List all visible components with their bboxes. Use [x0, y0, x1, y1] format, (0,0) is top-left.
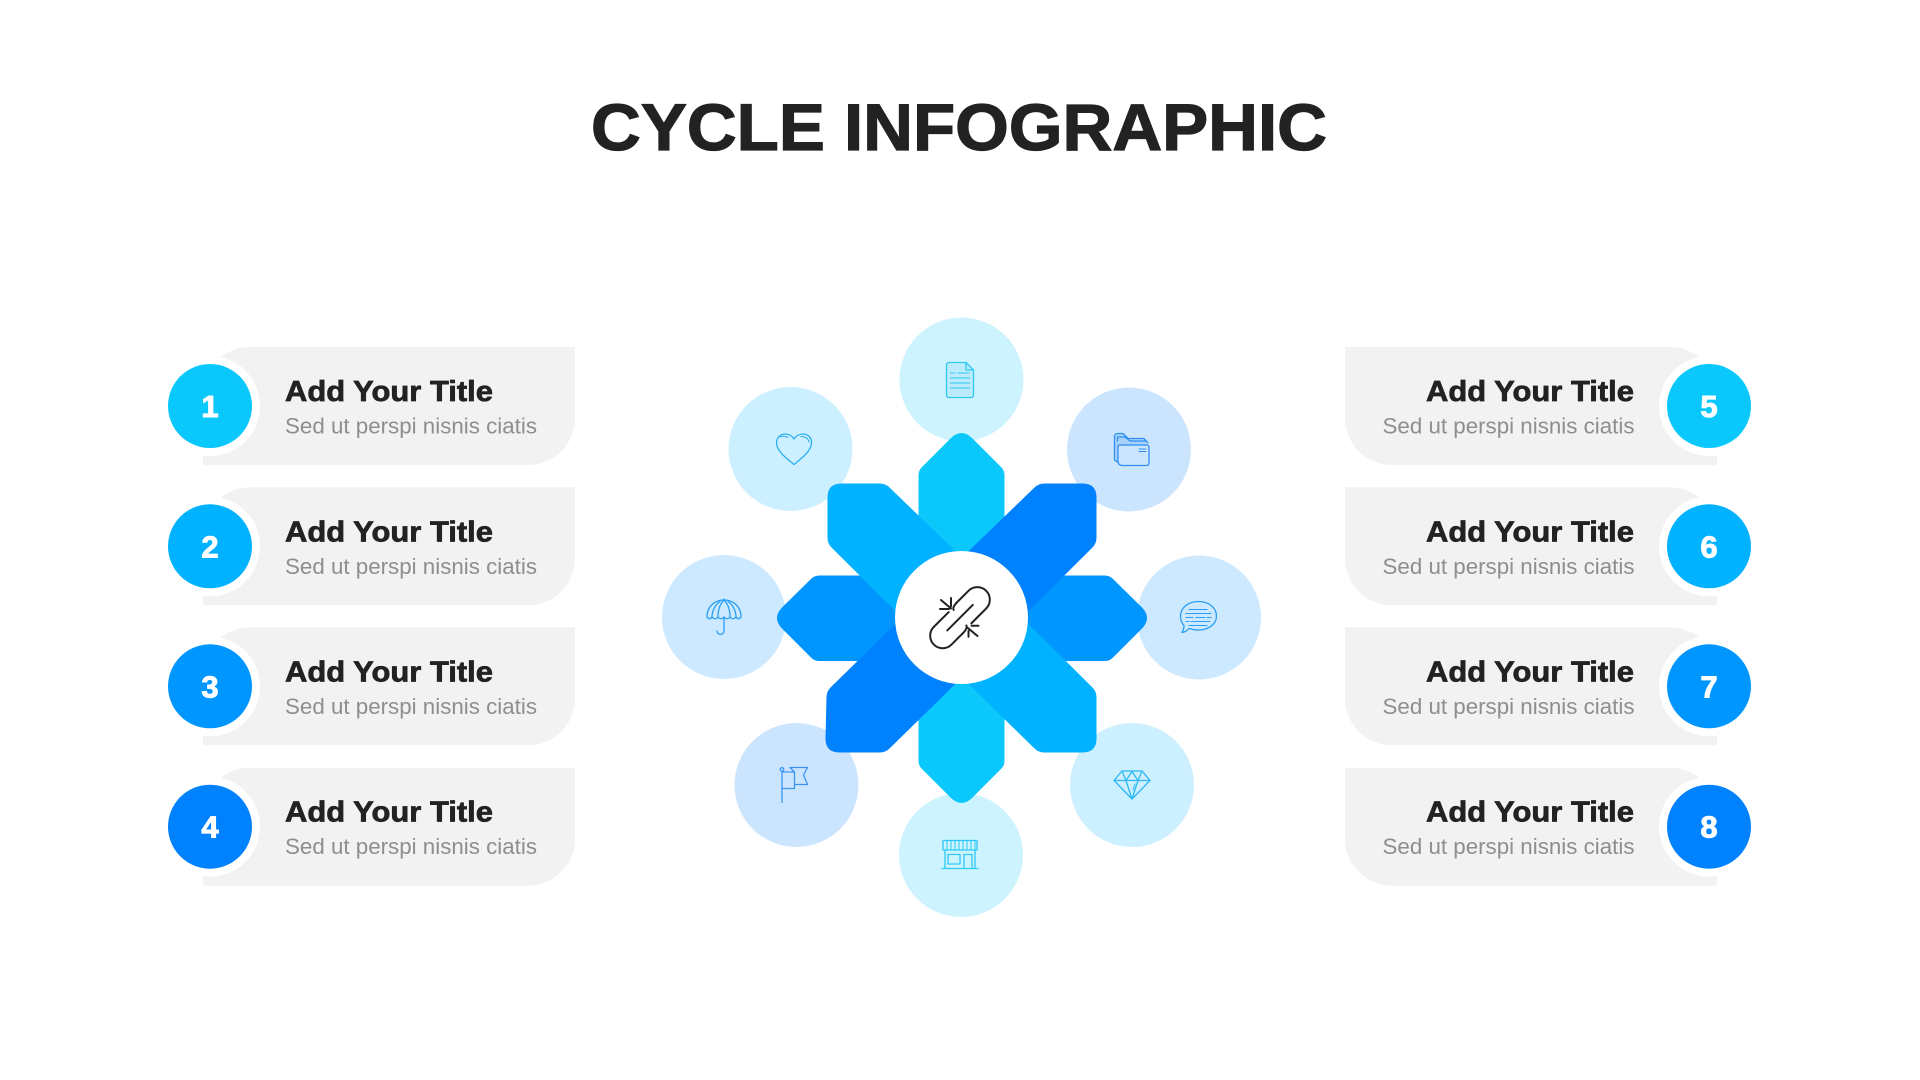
icon: broken chain link: [924, 582, 996, 653]
arms: [777, 433, 1147, 803]
arm: lower left: [826, 618, 962, 752]
circle: storefront: [899, 793, 1023, 917]
arm: lower right: [962, 618, 1096, 752]
panel: item 6: 6: [1700, 529, 1718, 564]
panel: item 8: Sed ut perspi nisnis ciatis: [1382, 834, 1634, 859]
panel: item 5: [1345, 347, 1759, 465]
panel: item 2: [160, 487, 575, 605]
panel: item 1: Sed ut perspi nisnis ciatis: [285, 414, 537, 438]
panel: item 8: Add Your Title: [1426, 797, 1634, 829]
panel: item 1: [160, 347, 575, 465]
panel: item 6: [1345, 487, 1759, 605]
arm: bottom: [918, 620, 1004, 803]
panel: item 3: Add Your Title: [285, 656, 493, 688]
panel: item 5: Sed ut perspi nisnis ciatis: [1382, 414, 1634, 438]
panel: item 7: Sed ut perspi nisnis ciatis: [1382, 694, 1634, 719]
panel: item 2: 2: [201, 529, 219, 564]
panel: item 6: Add Your Title: [1426, 516, 1634, 548]
arm: left: [777, 576, 962, 661]
arm: upper left: [828, 484, 962, 618]
arm: upper right: [962, 484, 1096, 618]
panel: item 7: Add Your Title: [1426, 656, 1634, 688]
circle: diamond: [1070, 723, 1194, 847]
arm: right: [962, 576, 1147, 661]
panel: item 4: 4: [201, 810, 219, 845]
panel: item 1: Add Your Title: [285, 376, 493, 408]
circle: umbrella: [662, 555, 786, 679]
panel: item 3: 3: [201, 669, 219, 704]
panel: item 6: Sed ut perspi nisnis ciatis: [1382, 554, 1634, 579]
circle: folder: [1067, 388, 1191, 512]
panel: item 4: Sed ut perspi nisnis ciatis: [285, 834, 537, 859]
circle: flag: [734, 723, 858, 847]
panel: item 3: Sed ut perspi nisnis ciatis: [285, 694, 537, 719]
hub circle: [895, 551, 1028, 684]
panel: item 7: [1345, 627, 1759, 745]
panel: item 2: Sed ut perspi nisnis ciatis: [285, 554, 537, 579]
panel: item 5: Add Your Title: [1426, 376, 1634, 408]
circle: document: [900, 318, 1024, 442]
circle: speech bubble: [1137, 556, 1261, 680]
panel: item 7: 7: [1700, 669, 1718, 704]
panel: item 1: 1: [201, 389, 219, 424]
panel: item 3: [160, 627, 575, 745]
title: CYCLE INFOGRAPHIC: [591, 90, 1327, 164]
panel: item 8: [1345, 768, 1759, 886]
panel: item 2: Add Your Title: [285, 516, 493, 548]
panel: item 8: 8: [1700, 810, 1718, 845]
panel: item 5: 5: [1700, 389, 1718, 424]
panel: item 4: Add Your Title: [285, 797, 493, 829]
cycle diagram: [662, 318, 1261, 917]
circle: heart: [728, 387, 852, 511]
arm: top: [918, 433, 1004, 620]
panel: item 4: [160, 768, 575, 886]
